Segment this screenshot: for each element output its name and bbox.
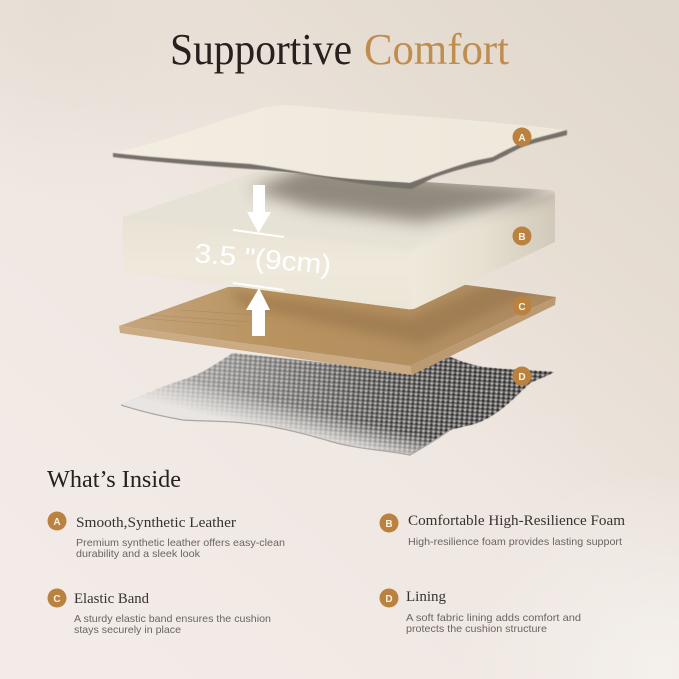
item C: A sturdy elastic band ensures the cushion <box>74 613 271 625</box>
badge D on diagram: D <box>518 372 526 383</box>
badge A on diagram <box>512 128 532 146</box>
badge C on diagram <box>512 296 532 316</box>
item A <box>48 512 285 560</box>
title: Comfort <box>364 25 509 74</box>
title <box>170 25 509 74</box>
item B <box>380 513 625 548</box>
badge A on diagram: A <box>518 133 526 144</box>
thickness dimension <box>193 185 333 336</box>
up arrow <box>246 288 270 336</box>
item C: Elastic Band <box>74 591 149 607</box>
item A: durability and a sleek look <box>76 548 201 560</box>
badge B on diagram <box>512 226 532 246</box>
item B: Comfortable High-Resilience Foam <box>408 513 625 529</box>
item C: stays securely in place <box>74 624 181 636</box>
dimension label: 3.5 "(9cm) <box>193 238 333 280</box>
item D: protects the cushion structure <box>406 623 547 635</box>
layer D: lining <box>121 353 554 455</box>
item A: A <box>53 517 61 528</box>
layer C: elastic band <box>119 285 556 375</box>
item A: Premium synthetic leather offers easy-clean <box>76 537 285 549</box>
item A: Smooth,Synthetic Leather <box>76 515 236 531</box>
item D <box>380 588 581 635</box>
item D: D <box>385 594 393 605</box>
badge C on diagram: C <box>518 302 526 313</box>
badge B on diagram: B <box>518 232 526 243</box>
item B: High-resilience foam provides lasting support <box>408 536 622 548</box>
down arrow <box>247 185 271 233</box>
item D: Lining <box>406 589 446 605</box>
item C: C <box>53 594 61 605</box>
item D: A soft fabric lining adds comfort and <box>406 612 581 624</box>
item C <box>48 588 271 636</box>
title: Supportive <box>170 25 352 74</box>
edge: leather thickness <box>113 130 567 189</box>
item B: B <box>385 519 393 530</box>
section heading: What’s Inside <box>47 467 181 493</box>
badge D on diagram <box>512 366 532 386</box>
layer A: synthetic leather <box>113 105 567 189</box>
layer B: foam <box>123 172 555 310</box>
